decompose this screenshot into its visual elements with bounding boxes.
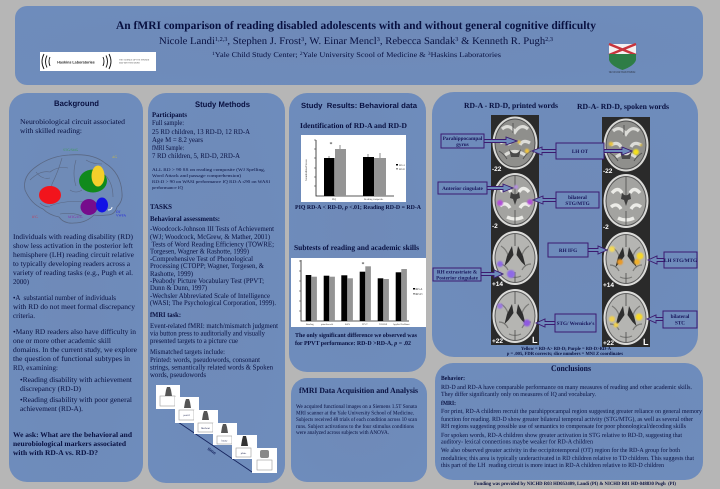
authors: 3 (377, 37, 380, 43)
panel: background (9, 93, 143, 482)
participants: Full sample: (152, 118, 184, 127)
authors: Nicole Landi (159, 36, 212, 47)
fMRI task: via button press to auditorially and visually (150, 328, 265, 338)
body text: background: 2000) (13, 277, 30, 286)
subheading: subtests: Subtests of reading and academic skills (294, 243, 419, 252)
fMRI conclusions: this part of the LH reading circuit is more intact in RD-A children relative to RD-D children (441, 462, 665, 469)
diagram labels: MTG/ITG (68, 215, 83, 219)
intro text (20, 117, 125, 135)
region: angular gyrus (yellow) (92, 166, 104, 186)
callout: bilateral STC: bilateral (671, 314, 690, 320)
body text: background: one or more other academic skill (13, 336, 111, 345)
bar chart: subtests: pseudowords (321, 323, 333, 326)
body text: background: achievement (RD-A). (20, 404, 83, 413)
heading: study methods: Study Methods (195, 100, 251, 109)
fMRI conclusions: RH regions suggesting possible use of semantics to compensate for poor phonological/decoding skills (441, 423, 687, 430)
inclusion criteria: performance IQ (152, 185, 184, 190)
diagram: task trial sequence: pencil (183, 414, 190, 417)
panel: fMRI data acquisition (291, 378, 427, 482)
participants: fMRI Sample: (152, 143, 184, 152)
bar chart: subtests: Applied Problems (393, 323, 410, 326)
callout: RH IFG: RH IFG (559, 248, 577, 254)
body text: background: Individuals with reading disability (RD) (13, 232, 134, 241)
inclusion criteria: ALL RD > 90 SS on reading composite (WJ Spelling, (152, 167, 265, 172)
callout: bilateral STC: STC (675, 320, 685, 326)
callout: bilateral STG/MTG: STG/MTG (565, 201, 590, 207)
affiliations: 2 (300, 51, 303, 57)
body text: background: discrepancy (RD-D) (20, 384, 82, 393)
diagram: task trial sequence: time (207, 446, 217, 456)
diagram labels: IFG (32, 215, 38, 219)
behavioral assessments: Dunn & Dunn, 1997) (150, 283, 208, 292)
heading: conclusions: Conclusions (551, 363, 592, 373)
body text: background: •A substantial number of individuals (13, 293, 116, 302)
region: inferior frontal (red) (39, 186, 61, 204)
brain slices: spoken words: L (643, 337, 649, 347)
region: temporoparietal (green) (79, 170, 107, 192)
callout: RH extrastriate and posterior cingulate: Posterior cingulate (436, 276, 479, 282)
body text: background: •Reading disability with achievement (20, 375, 132, 384)
fMRI task: strings, semantically related words & Spoken (150, 362, 273, 372)
fMRI task: Printed: words, pseudowords, consonant (150, 355, 260, 364)
heading: spoken words: RD-A- RD-D, spoken words (577, 102, 669, 111)
brain slices: spoken words: -2 (603, 224, 609, 231)
behavioral assessments: -Woodcock-Johnson III Tests of Achievement (150, 224, 274, 233)
panel: header (15, 6, 703, 85)
brain slices: spoken words: +14 (603, 282, 614, 289)
brain slices: printed words: -2 (492, 223, 498, 230)
caption: subtests: The only significant difference we observed was (295, 332, 418, 339)
fMRI conclusions: We also observed greater activity in the occipitotemporal (OT) region for the RD-A group for both (441, 447, 681, 454)
callout: parahippocampal gyrus: Parahippocampal (443, 136, 483, 142)
bar chart: PIQ and reading composite: Reading composite (364, 198, 384, 201)
bar chart: subtests: Reading (306, 323, 315, 326)
authors: , Rebecca Sandak (380, 36, 456, 47)
fMRI task: Event-related fMRI: match/mismatch judgment (150, 321, 278, 330)
legend caption: brain maps: Yellow = RD-A> RD-D; Purple = RD-D>RD-A (521, 346, 611, 352)
bar chart: subtests: * (362, 262, 364, 268)
body text: background: domains. In the current study, we explore (13, 345, 137, 354)
bar chart: PIQ and reading composite (301, 135, 406, 202)
inclusion criteria (152, 167, 271, 190)
bar chart: PIQ and reading composite: PIQ (332, 198, 336, 201)
authors: & Kenneth R. Pugh (458, 36, 545, 47)
diagram: task trial sequence (156, 385, 277, 473)
logo: Haskins Laboratories: AND WRITTEN WORD (119, 62, 140, 64)
research question: with with RD-A vs. RD-D? (13, 448, 98, 457)
body text: background: hemisphere (LH) reading circuit relative (13, 250, 134, 259)
behavioral assessments: Tests of Word Reading Efficiency (TOWRE; (150, 240, 274, 248)
affiliations: 3 (428, 51, 431, 57)
diagram labels (32, 148, 127, 219)
research question: We ask: What are the behavioral and (13, 430, 132, 439)
callout: bilateral STG/MTG: bilateral (568, 195, 587, 201)
participants: 25 RD children, 13 RD-D, 12 RD-A (152, 127, 251, 136)
panel: study methods (148, 93, 285, 483)
authors: 3 (455, 37, 458, 43)
inclusion criteria: Word Attack and passage comprehension) (152, 173, 242, 178)
brain slices: printed words: +22 (492, 338, 503, 345)
fMRI task: Mismatched targets include: (150, 347, 225, 356)
subheading: identification: Identification of RD-A and RD-D (300, 121, 408, 130)
research question (13, 430, 132, 457)
bar chart: subtests: RD-D (416, 293, 422, 296)
heading: printed words: RD-A - RD-D, printed words (464, 101, 558, 110)
behavioral assessments: -Wechsler Abbreviated Scale of Intelligence (150, 291, 270, 300)
fMRI conclusions: For print, RD-A children recruit the parahippocampal region suggesting greater reliance on general memory (441, 408, 703, 415)
behavior conclusions: RD-D and RD-A have comparable performance on many measures of reading and other academic skills. (441, 384, 692, 391)
affiliations: Haskins Laboratories (431, 50, 501, 59)
body text: acquisition (296, 404, 417, 436)
fMRI conclusions (441, 400, 703, 469)
behavior conclusions (441, 375, 692, 398)
callout: parahippocampal gyrus: gyrus (456, 142, 469, 148)
diagram labels: AG (112, 155, 118, 159)
authors: , W. Einar Mencl (304, 36, 377, 47)
brain slices: spoken words: +22 (603, 340, 614, 347)
body text: background: the question of functional subtypes in (13, 354, 130, 363)
callout: LH STG/MTG: LH STG/MTG (664, 258, 697, 264)
fMRI task: fMRI task: (150, 310, 181, 319)
diagram: task trial sequence: house (222, 440, 228, 442)
heading: acquisition: fMRI Data Acquisition and Analysis (299, 386, 418, 395)
authors: 1,2,3 (215, 37, 227, 43)
tasks heading: TASKS (150, 202, 172, 211)
title: An fMRI comparison of reading disabled adolescents with and without general cognitive difficulty (116, 20, 596, 32)
brain slices: printed words: -22 (492, 166, 502, 173)
brain slices: printed words (491, 115, 539, 345)
research question: neurobiological markers associated (13, 439, 126, 448)
participants (152, 110, 251, 160)
behavioral assessments: Torgesen, Wagner & Rashotte, 1999) (150, 246, 250, 256)
body text: acquisition: We acquired functional images on a Siemens 1.5T Sonata (296, 404, 417, 410)
funding note: Funding was provided by NICHD R03 HD053409, Landi (PI) & NICHD R01 HD-048830 Pugh (PI) (474, 481, 676, 487)
bar chart: subtests: RAN (345, 323, 350, 326)
panel: behavioral results (289, 93, 426, 372)
fMRI conclusions: For spoken words, RD-A children show greater activation in STG relative to RD-D, suggesting that (441, 432, 682, 439)
bar chart: PIQ and reading composite: RD-A (399, 164, 405, 167)
body text: background: show less activation in the posterior left (13, 241, 133, 250)
behavioral assessments: (WJ; Woodcock, McGrew, & Mather, 2001) (150, 232, 271, 241)
body text: background: •Reading disability with poor general (20, 395, 132, 404)
body text: background: with RD do not meet formal discrepancy (13, 302, 135, 311)
diagram labels: OT (116, 210, 122, 214)
fMRI task: words, pseudowords (150, 370, 206, 379)
behavioral assessments (150, 214, 276, 307)
inclusion criteria: RD-D > 90 on WASI performance IQ RD-A ≤90 on WASI (152, 179, 271, 184)
brain slices: printed words: L (532, 335, 538, 345)
participants: Participants (152, 110, 187, 119)
callout: anterior cingulate: Anterior cingulate (442, 186, 484, 192)
body text: background: •Many RD readers also have difficulty in (13, 327, 136, 336)
intro text: Neurobiological circuit associated (20, 117, 125, 126)
fMRI task: presented targets to a picture cue (150, 336, 238, 345)
bar chart: subtests: PPVT (362, 323, 368, 326)
logo: Haskins Laboratories: THE SCIENCE OF THE SPOKEN (119, 58, 150, 62)
legend caption: brain maps (506, 346, 623, 357)
logo: Yale shield (609, 44, 636, 74)
brain slices: spoken words (602, 117, 650, 347)
fMRI conclusions: fMRI: (441, 400, 456, 407)
callout: LH STG/MTG (648, 252, 697, 268)
caption: identification: PIQ RD-A < RD-D, p <.01; Reading RD-D = RD-A (295, 204, 422, 211)
callout: LH OT: LH OT (572, 149, 589, 155)
behavior conclusions: They differ significantly only on measures of IQ and vocabulary. (441, 391, 596, 398)
diagram labels: STG/SMG (63, 148, 79, 152)
participants: 7 RD children, 5, RD-D, 2RD-A (152, 151, 241, 160)
intro text: with skilled reading: (20, 126, 82, 135)
heading: behavioral results: Study Results: Behavioral data (301, 101, 418, 110)
behavioral assessments: (WASI; The Psychological Corporation, 1999). (150, 298, 276, 307)
brain diagram: reading circuit (24, 148, 127, 223)
bar chart: subtests: TOWRE (379, 323, 388, 326)
affiliations: Yale Child Study Center; (215, 50, 300, 59)
fMRI conclusions: modalities; this area is typically underactivated in RD children relative to TD children. This suggests that (441, 455, 694, 462)
behavioral assessments: -Comprehensive Test of Phonological (150, 254, 253, 263)
bar chart: PIQ and reading composite: * (330, 142, 332, 148)
legend caption: brain maps: p = .005, FDR corrects; slice numbers = MNI Z coordinates (506, 351, 623, 357)
affiliations: 1 (212, 51, 215, 57)
bar chart: PIQ and reading composite: Standardized Score (305, 158, 308, 181)
behavioral assessments: Processing (CTOPP; Wagner, Torgesen, & (150, 261, 264, 270)
body text: acquisition: MRI scanner at the Yale University School of Medicine. (296, 410, 415, 416)
callout: STG Wernicke's (536, 314, 596, 332)
fMRI conclusions: auditory- lexical connections maybe weaker for RD-A children (441, 438, 594, 446)
region: middle temporal (purple) (80, 199, 98, 215)
logo: Haskins Laboratories: Haskins Laboratories (57, 60, 95, 64)
region: occipitotemporal (blue) (96, 198, 108, 212)
authors: 3 (301, 37, 304, 43)
body text: background: to typically developing readers across a (13, 259, 131, 268)
callout: LH OT (532, 143, 632, 159)
body text: acquisition: runs. Subject activations to the four stimulus conditions (296, 424, 414, 430)
body text: acquisition: were analyzed across subjects with ANOVA. (296, 430, 390, 436)
affiliations: Yale University Scool of Medicine & (303, 50, 428, 59)
behavioral assessments: Rashotte, 1999) (150, 269, 194, 278)
body text: background: criteria. (13, 311, 35, 320)
callout: STG Wernicke's: STG/ Wernicke's (557, 321, 594, 327)
callout: RH extrastriate and posterior cingulate: RH extrastriate & (437, 270, 478, 276)
authors: 2,3 (545, 37, 553, 43)
fMRI task (150, 310, 278, 379)
panel: conclusions (435, 363, 703, 480)
body text: background (13, 232, 137, 413)
heading: background: Background (54, 99, 99, 108)
callout: anterior cingulate (438, 182, 513, 194)
diagram: task trial sequence: plane (241, 452, 247, 455)
logo: Yale shield: Yale University School of Medicine (609, 70, 636, 74)
caption: subtests: for PPVT performance: RD-D >RD-A, p = .02 (295, 340, 411, 347)
diagram labels: VWFA (116, 214, 127, 218)
caption: subtests (295, 332, 418, 347)
bar chart: subtests (291, 258, 426, 327)
body text: background: variety of reading tasks (e.g., Pugh et al. (13, 268, 133, 277)
behavioral assessments: -Peabody Picture Vocabulary Test (PPVT; (150, 276, 264, 285)
callout: bilateral STG/MTG (533, 192, 599, 208)
bar chart: subtests: RD-A (416, 288, 422, 291)
brain slices: printed words: +14 (492, 281, 503, 288)
fMRI conclusions: function for reading. RD-D show greater bilateral temporal activity (STG/MTG), as well as several other (441, 416, 694, 423)
bar chart: PIQ and reading composite: RD-D (399, 168, 405, 171)
body text: background: RD, examining: (13, 363, 58, 372)
logo: Haskins Laboratories (40, 52, 156, 71)
behavioral assessments: Behavioral assessments: (150, 214, 220, 223)
callout: RH IFG (548, 243, 607, 257)
participants: Age M = 8.2 years (152, 135, 203, 144)
body text: acquisition: Subjects received 48 trials of each condition across 10 scan (296, 417, 417, 423)
authors: , Stephen J. Frost (227, 36, 301, 47)
callout: bilateral STC (647, 311, 697, 328)
diagram: task trial sequence: blackout (201, 427, 210, 430)
callout: RH extrastriate and posterior cingulate (433, 268, 503, 282)
behavior conclusions: Behavior: (441, 375, 465, 382)
brain slices: spoken words: -22 (603, 168, 613, 175)
panel: brain imaging results (432, 92, 698, 357)
callout: parahippocampal gyrus (441, 134, 517, 148)
